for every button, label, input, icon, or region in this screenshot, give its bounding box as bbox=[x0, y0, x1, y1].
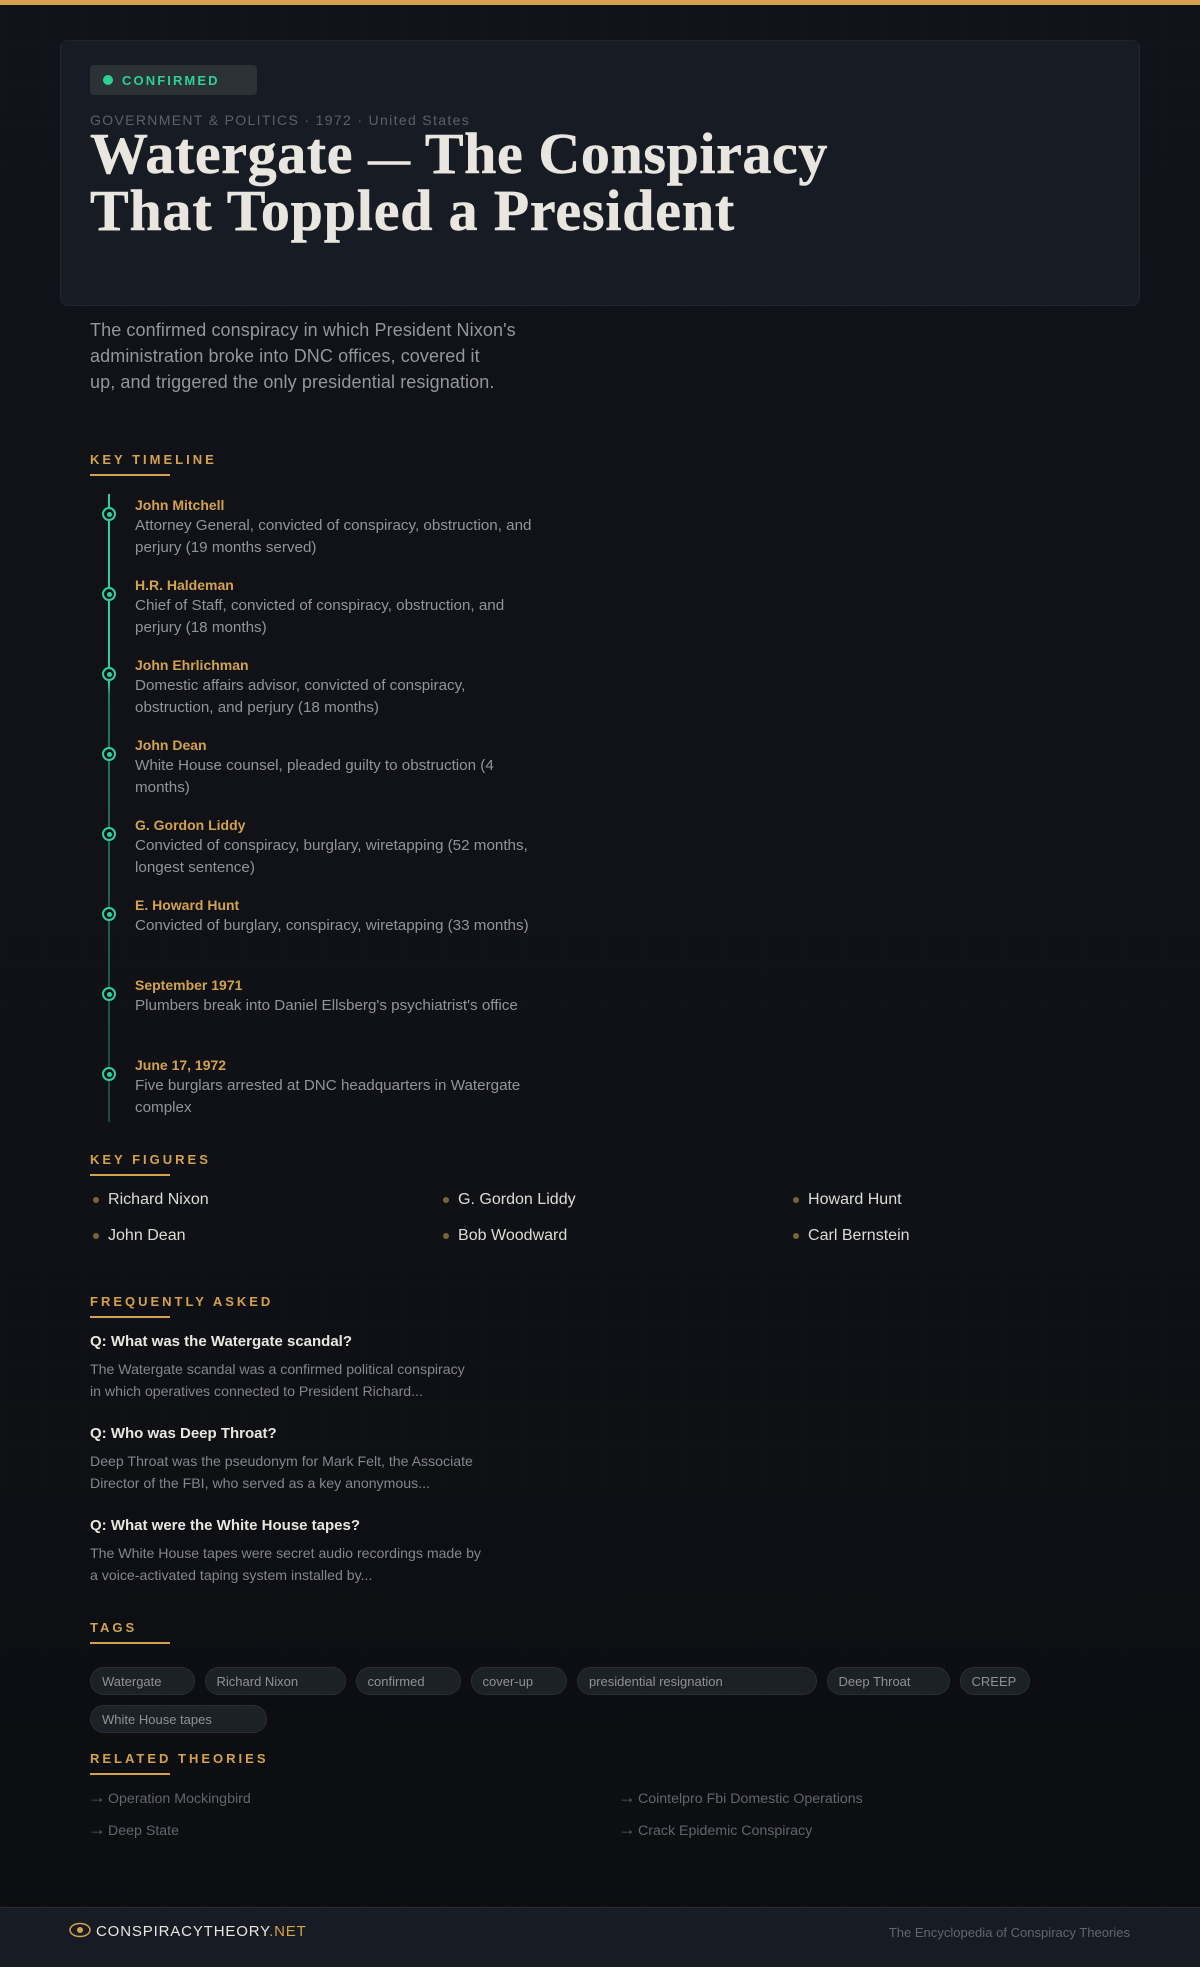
badge label: CONFIRMED bbox=[122, 73, 220, 88]
top accent bar bbox=[0, 0, 1200, 5]
timeline entry: June 17, 1972: complex bbox=[135, 1099, 192, 1116]
timeline entry: John Ehrlichman: obstruction, and perjury (18 months) bbox=[135, 699, 379, 716]
wordmark: CONSPIRACYTHEORY.NET bbox=[96, 1923, 307, 1940]
footer bbox=[0, 1907, 1200, 1967]
faq item 3: a voice-activated taping system installed by... bbox=[90, 1567, 372, 1583]
timeline entry: E. Howard Hunt bbox=[102, 897, 529, 934]
timeline entry: G. Gordon Liddy: Convicted of conspiracy, burglary, wiretapping (52 months, bbox=[135, 837, 528, 854]
heading: key figures: KEY FIGURES bbox=[90, 1152, 211, 1167]
figure: Carl Bernstein: Carl Bernstein bbox=[808, 1226, 910, 1244]
panel: hero header bbox=[60, 40, 1140, 306]
related link: Cointelpro Fbi Domestic Operations: Cointelpro Fbi Domestic Operations bbox=[638, 1791, 863, 1807]
title: Watergate — The Conspiracy bbox=[90, 121, 828, 186]
timeline entry: John Ehrlichman: Domestic affairs advisor, convicted of conspiracy, bbox=[135, 677, 465, 694]
footer tagline: The Encyclopedia of Conspiracy Theories bbox=[889, 1925, 1130, 1940]
tag: Richard Nixon bbox=[204, 1667, 346, 1695]
faq item 3 bbox=[90, 1517, 481, 1583]
tag: Richard Nixon: Richard Nixon bbox=[216, 1674, 298, 1689]
figure: Bob Woodward: Bob Woodward bbox=[458, 1226, 567, 1244]
tag: CREEP bbox=[960, 1667, 1030, 1695]
tag: cover-up: cover-up bbox=[482, 1674, 533, 1689]
timeline entry: John Dean bbox=[102, 737, 494, 796]
timeline entry: John Dean: White House counsel, pleaded guilty to obstruction (4 bbox=[135, 757, 494, 774]
timeline: John Dean bbox=[135, 737, 207, 753]
heading: tags: TAGS bbox=[90, 1620, 137, 1635]
timeline: June 17, 1972 bbox=[135, 1057, 226, 1073]
timeline entry: John Mitchell: Attorney General, convicted of conspiracy, obstruction, and bbox=[135, 517, 532, 534]
timeline: September 1971 bbox=[135, 977, 242, 993]
status badge: confirmed bbox=[90, 65, 257, 95]
heading: frequently asked: FREQUENTLY ASKED bbox=[90, 1294, 273, 1309]
tag: Deep Throat bbox=[826, 1667, 950, 1695]
summary paragraph: The confirmed conspiracy in which President Nixon's bbox=[90, 320, 516, 340]
timeline entry: G. Gordon Liddy bbox=[102, 817, 528, 876]
title bbox=[90, 121, 828, 243]
timeline entry: H.R. Haldeman: perjury (18 months) bbox=[135, 619, 267, 636]
related link: Deep State: → bbox=[88, 1819, 106, 1839]
tag: confirmed bbox=[356, 1667, 460, 1695]
faq item 3: Q: What were the White House tapes? bbox=[90, 1517, 360, 1534]
timeline: John Ehrlichman bbox=[135, 657, 249, 673]
tag: confirmed: confirmed bbox=[368, 1674, 425, 1689]
key figures list bbox=[93, 1190, 910, 1244]
timeline entry: G. Gordon Liddy: longest sentence) bbox=[135, 859, 255, 876]
icon: eye logo bbox=[69, 1922, 91, 1938]
timeline: E. Howard Hunt bbox=[135, 897, 239, 913]
timeline: H.R. Haldeman bbox=[135, 577, 234, 593]
tag: White House tapes bbox=[90, 1705, 267, 1733]
title: That Toppled a President bbox=[90, 178, 735, 243]
related link: Crack Epidemic Conspiracy: Crack Epidemic Conspiracy bbox=[638, 1823, 812, 1839]
tag: Watergate bbox=[90, 1667, 195, 1695]
timeline entry: June 17, 1972 bbox=[102, 1057, 520, 1116]
timeline entry: John Dean: months) bbox=[135, 779, 190, 796]
category meta line: GOVERNMENT & POLITICS · 1972 · United States bbox=[90, 112, 470, 128]
related link: Deep State: Deep State bbox=[108, 1823, 179, 1839]
faq item 2: Q: Who was Deep Throat? bbox=[90, 1425, 277, 1442]
figure: John Dean: John Dean bbox=[108, 1226, 186, 1244]
faq item 2: Deep Throat was the pseudonym for Mark Felt, the Associate bbox=[90, 1453, 473, 1469]
heading: related theories: RELATED THEORIES bbox=[90, 1751, 268, 1766]
summary paragraph bbox=[90, 320, 516, 392]
tag: presidential resignation bbox=[577, 1667, 817, 1695]
tag list bbox=[90, 1667, 1030, 1733]
timeline entry: John Ehrlichman bbox=[102, 657, 465, 716]
faq item 1 bbox=[90, 1333, 465, 1399]
faq item 2 bbox=[90, 1425, 473, 1491]
summary paragraph: administration broke into DNC offices, covered it bbox=[90, 346, 480, 366]
tag: Watergate: Watergate bbox=[102, 1674, 162, 1689]
faq item 1: The Watergate scandal was a confirmed political conspiracy bbox=[90, 1361, 465, 1377]
timeline entry: John Mitchell bbox=[102, 497, 532, 556]
faq item 1: in which operatives connected to President Richard... bbox=[90, 1383, 423, 1399]
timeline entry: H.R. Haldeman bbox=[102, 577, 504, 636]
tag: CREEP: CREEP bbox=[972, 1674, 1016, 1689]
faq item 2: Director of the FBI, who served as a key anonymous... bbox=[90, 1475, 430, 1491]
figure: Howard Hunt: Howard Hunt bbox=[808, 1190, 902, 1208]
summary paragraph: up, and triggered the only presidential resignation. bbox=[90, 372, 494, 392]
timeline spine bbox=[108, 494, 110, 1122]
faq item 1: Q: What was the Watergate scandal? bbox=[90, 1333, 352, 1350]
timeline bbox=[102, 494, 532, 1122]
timeline entry: John Mitchell: perjury (19 months served) bbox=[135, 539, 316, 556]
badge dot bbox=[103, 75, 113, 85]
timeline entry: June 17, 1972: Five burglars arrested at DNC headquarters in Watergate bbox=[135, 1077, 520, 1094]
related theories list bbox=[88, 1787, 863, 1839]
related link: Crack Epidemic Conspiracy: → bbox=[618, 1819, 636, 1839]
timeline: G. Gordon Liddy bbox=[135, 817, 245, 833]
figure: G. Gordon Liddy: G. Gordon Liddy bbox=[458, 1190, 576, 1208]
faq item 3: The White House tapes were secret audio recordings made by bbox=[90, 1545, 481, 1561]
heading: key timeline: KEY TIMELINE bbox=[90, 452, 217, 467]
timeline entry: E. Howard Hunt: Convicted of burglary, conspiracy, wiretapping (33 months) bbox=[135, 917, 529, 934]
tag: Deep Throat: Deep Throat bbox=[838, 1674, 911, 1689]
tag: White House tapes: White House tapes bbox=[102, 1712, 212, 1727]
timeline entry: September 1971 bbox=[102, 977, 518, 1014]
timeline: John Mitchell bbox=[135, 497, 224, 513]
related link: Operation Mockingbird: Operation Mockingbird bbox=[108, 1791, 251, 1807]
related link: Operation Mockingbird: → bbox=[88, 1787, 106, 1807]
timeline entry: H.R. Haldeman: Chief of Staff, convicted of conspiracy, obstruction, and bbox=[135, 597, 504, 614]
tag: presidential resignation: presidential resignation bbox=[589, 1674, 723, 1689]
tag: cover-up bbox=[470, 1667, 566, 1695]
figure: Richard Nixon: Richard Nixon bbox=[108, 1190, 209, 1208]
related link: Cointelpro Fbi Domestic Operations: → bbox=[618, 1787, 636, 1807]
timeline entry: September 1971: Plumbers break into Daniel Ellsberg's psychiatrist's office bbox=[135, 997, 518, 1014]
related link: Deep State bbox=[88, 1819, 179, 1839]
